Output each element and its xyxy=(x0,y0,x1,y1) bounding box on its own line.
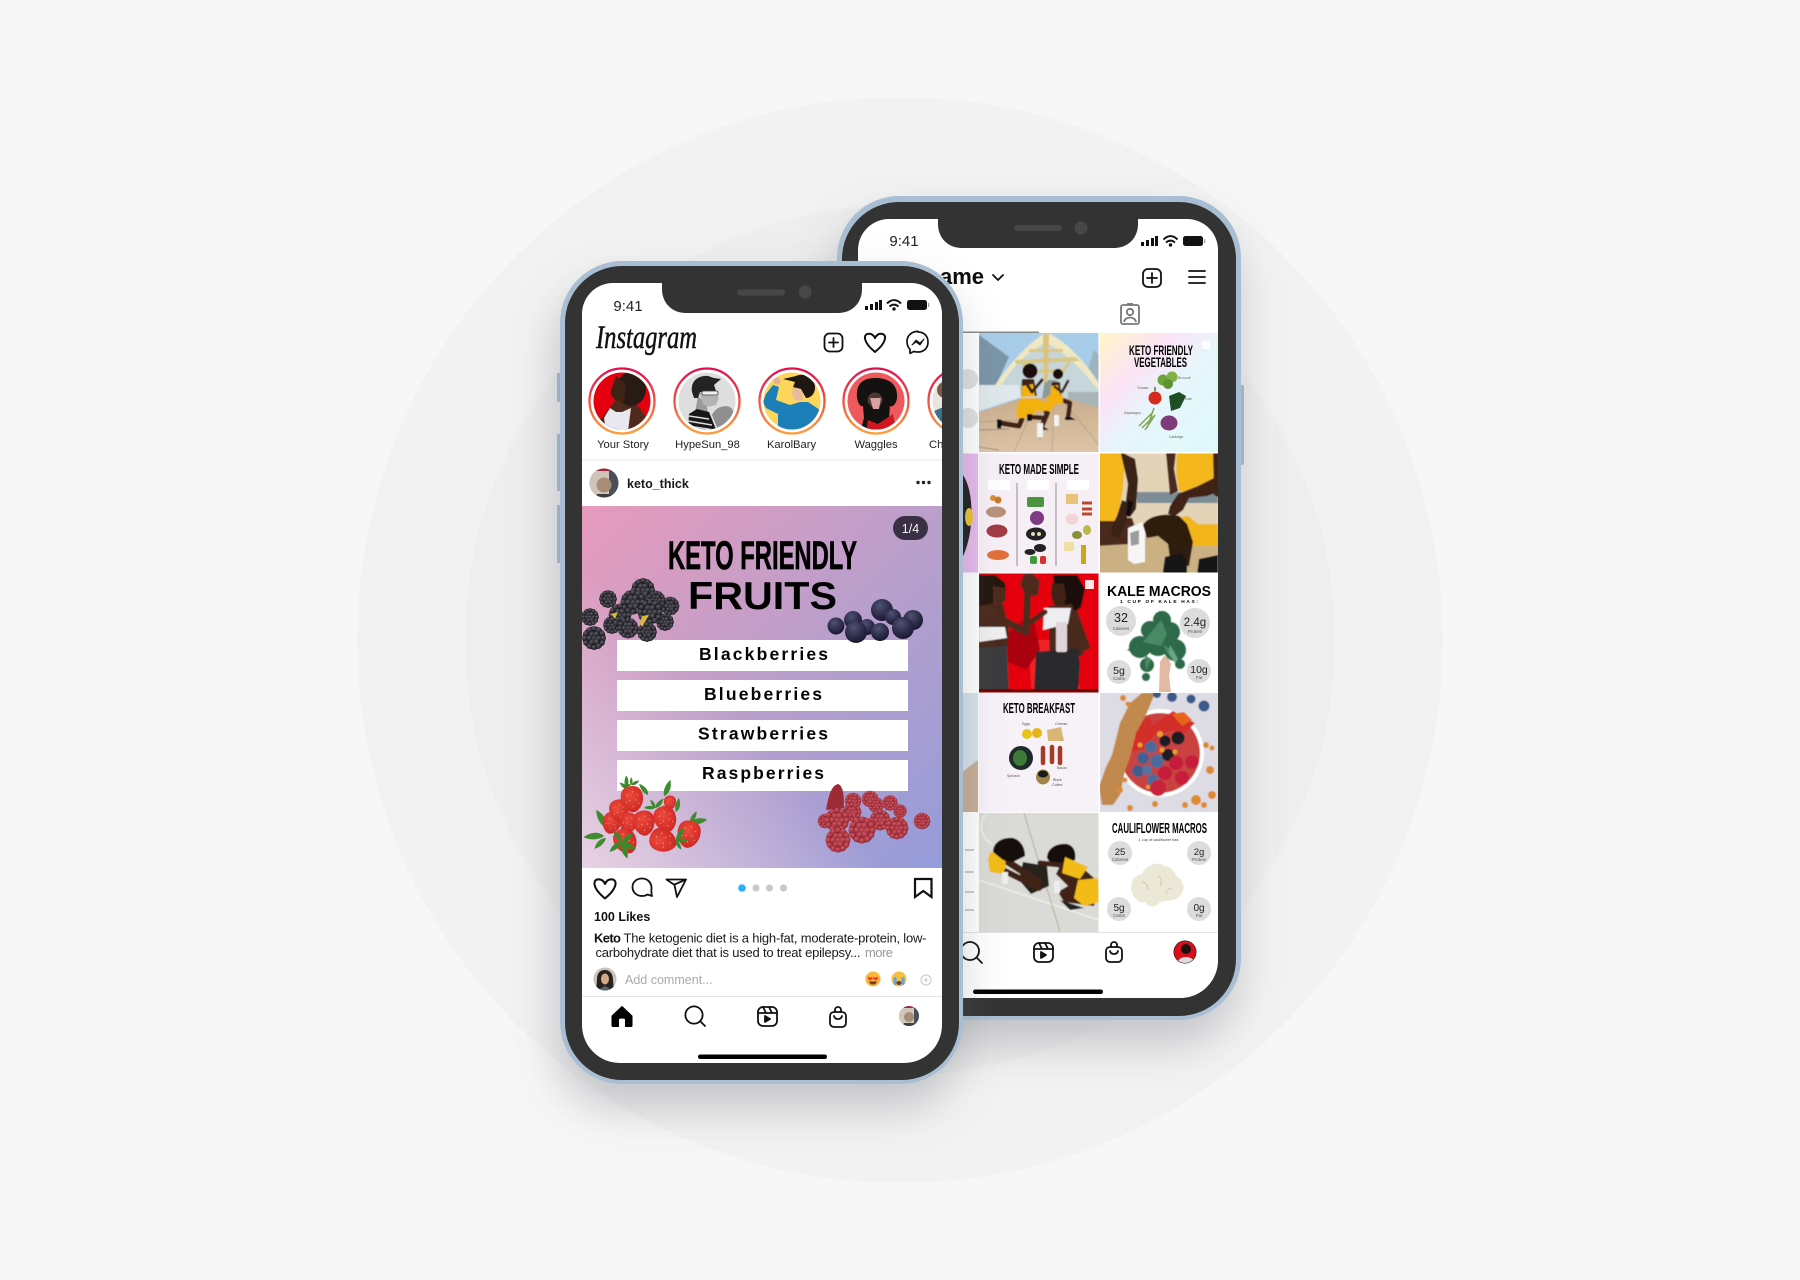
grid photo: high five on red xyxy=(979,574,1098,692)
story labels: KarolBary xyxy=(767,439,816,451)
grid card: kale macros: KALE MACROS xyxy=(1107,584,1211,600)
notch xyxy=(938,216,1138,248)
icon: notifications xyxy=(865,334,885,352)
icon: shop xyxy=(830,1007,846,1027)
grid card: cauliflower macros: 2g xyxy=(1194,847,1204,858)
story labels: HypeSun_98 xyxy=(675,439,740,451)
right woman xyxy=(1176,454,1214,492)
post avatar xyxy=(590,468,619,500)
icon: comment xyxy=(632,878,652,896)
grid card: cauliflower macros: Carbs xyxy=(1113,913,1126,918)
story labels: Waggles xyxy=(854,439,898,451)
grid card: cauliflower macros xyxy=(1107,823,1211,921)
grid card: kale macros xyxy=(1106,586,1211,692)
icon: add reaction xyxy=(921,975,931,985)
grid card: keto breakfast xyxy=(979,693,1098,812)
grid card: kale macros: 10g xyxy=(1190,664,1208,676)
caption xyxy=(594,930,926,960)
grid card: keto friendly vegetables: Tomato xyxy=(1137,386,1149,390)
icon: messenger xyxy=(907,331,928,353)
carousel dots xyxy=(738,884,787,892)
background circle: inner xyxy=(465,205,1335,1075)
fruit list: Strawberries xyxy=(698,724,828,744)
strawberries xyxy=(583,775,707,858)
icon: tagged xyxy=(1121,304,1139,324)
home indicator xyxy=(698,1054,827,1059)
grid card: kale macros: 2.4g xyxy=(1184,617,1206,629)
fruit list: Blackberries xyxy=(699,644,828,664)
grid card: cauliflower macros: Fat xyxy=(1196,913,1203,918)
nav divider xyxy=(582,996,942,997)
status bar xyxy=(613,298,929,315)
grid card: keto friendly vegetables: Cabbage xyxy=(1169,435,1183,439)
icon: shop xyxy=(1106,942,1122,962)
caption: Keto xyxy=(594,930,621,946)
profile avatar xyxy=(899,1006,919,1027)
icon: search xyxy=(685,1006,705,1026)
story divider xyxy=(582,460,942,461)
username header: Username xyxy=(878,264,984,289)
background circle: outer xyxy=(357,97,1443,1183)
post options xyxy=(916,481,931,484)
grid photo: sitting with milk xyxy=(1100,454,1218,572)
story labels xyxy=(597,439,943,451)
grid card: keto breakfast: Eggs xyxy=(1022,722,1030,726)
screen xyxy=(858,219,1222,998)
grid card: keto breakfast: Spinach xyxy=(1007,774,1020,778)
emoji: crying xyxy=(892,972,906,986)
profile avatar xyxy=(1174,940,1196,964)
comment row xyxy=(594,968,931,994)
page badge: 1/4 xyxy=(902,522,919,536)
story labels: Your Story xyxy=(597,439,649,451)
post actions xyxy=(594,878,932,898)
bottom nav: back phone xyxy=(963,932,1218,998)
grid card: keto friendly vegetables xyxy=(1100,333,1218,452)
comment row: Add comment... xyxy=(625,973,713,987)
grid card: cauliflower macros: 1 cup of cauliflower has: xyxy=(1139,838,1179,842)
left woman xyxy=(1100,517,1135,546)
milk carton xyxy=(1128,522,1145,564)
story: karolbary xyxy=(760,368,824,434)
phone body xyxy=(560,261,963,1084)
heading: KETO FRIENDLY xyxy=(668,534,857,578)
post username: keto_thick xyxy=(627,477,689,491)
grid card: kale macros: Carbs xyxy=(1113,676,1126,681)
commenter avatar xyxy=(594,968,616,994)
status bar: 9:41 xyxy=(613,298,643,315)
grid card: keto breakfast: Black xyxy=(1053,778,1062,782)
left woman xyxy=(979,604,1009,650)
icon: reels xyxy=(758,1007,777,1026)
tab underline xyxy=(963,332,1039,333)
grid card: cauliflower macros: 0g xyxy=(1193,903,1205,914)
icon: menu xyxy=(1189,271,1205,283)
grid card: keto breakfast: Bacon xyxy=(1057,766,1067,770)
front phone: feed xyxy=(557,261,994,1084)
story: hypesun_98 xyxy=(674,368,740,434)
blueberries xyxy=(828,599,923,643)
story: waggles xyxy=(844,368,908,434)
likes: 100 Likes xyxy=(594,910,650,924)
grid photo: stretching on concrete xyxy=(979,813,1098,932)
woman 2 xyxy=(1030,412,1048,418)
grid card: kale macros: 1 CUP OF KALE HAS: xyxy=(1120,599,1198,605)
grid card: keto breakfast: Cheese xyxy=(1055,722,1067,726)
grid photo: fruit bowl xyxy=(1100,693,1218,812)
caption: The ketogenic diet is a high-fat, moderate-protein, low- xyxy=(624,930,926,946)
fruit list: Blueberries xyxy=(704,684,822,704)
grid card: cauliflower macros: Calories xyxy=(1112,857,1129,862)
icon: add xyxy=(1143,269,1161,287)
story: your story xyxy=(590,368,654,434)
woman 1 xyxy=(1000,419,1022,426)
screen xyxy=(582,283,942,1063)
status bar: 9:41 xyxy=(889,233,919,250)
caption: carbohydrate diet that is used to treat epilepsy... xyxy=(596,945,860,960)
back phone: profile grid xyxy=(837,196,1244,1020)
caption: more xyxy=(865,945,893,960)
phone body xyxy=(837,196,1241,1020)
instagram logo: Instagram xyxy=(595,320,697,356)
icon: like xyxy=(594,879,616,898)
page badge xyxy=(893,516,928,540)
speaker and camera xyxy=(737,286,812,298)
right woman xyxy=(1053,575,1085,615)
story: partial xyxy=(928,368,994,434)
phone side buttons xyxy=(557,373,560,563)
emoji: heart eyes xyxy=(866,972,880,986)
grid card: kale macros: Fat xyxy=(1196,675,1203,680)
icon: home xyxy=(612,1006,632,1026)
grid card: kale macros: 5g xyxy=(1113,665,1125,677)
grid card: cauliflower macros: Protein xyxy=(1192,857,1207,862)
grid card: kale macros: Protein xyxy=(1188,629,1203,634)
grid card: cauliflower macros: 5g xyxy=(1113,903,1125,914)
grid card: keto breakfast: Coffee xyxy=(1052,783,1063,787)
grid photo: bridge lunge xyxy=(979,333,1098,452)
grid card: keto made simple xyxy=(979,454,1098,572)
grid card: keto friendly vegetables: Asparagus xyxy=(1124,411,1141,415)
grid card: kale macros: 32 xyxy=(1114,611,1128,625)
icon: search xyxy=(961,942,982,963)
bottom nav: front phone xyxy=(612,1006,919,1059)
blackberries xyxy=(581,578,679,650)
story labels: Ch xyxy=(929,439,943,451)
grid card: keto friendly vegetables: Broccoli xyxy=(1178,376,1191,380)
icon: share xyxy=(666,880,686,897)
icon: reels xyxy=(1034,943,1053,962)
notch xyxy=(662,280,862,313)
icon: save xyxy=(915,879,932,897)
raspberries xyxy=(818,784,930,853)
fruit list xyxy=(617,640,908,791)
home indicator xyxy=(973,990,1103,994)
fruit list: Raspberries xyxy=(702,763,824,783)
icon: add post xyxy=(824,334,842,352)
grid card: keto friendly vegetables: Kale xyxy=(1185,397,1192,401)
grid column 1 remnant xyxy=(963,369,978,911)
status bar xyxy=(889,233,1205,250)
grid card: cauliflower macros: 25 xyxy=(1115,847,1125,858)
post image: keto friendly fruits xyxy=(581,506,942,868)
post image: keto friendly fruits: FRUITS xyxy=(688,575,837,618)
grid card: kale macros: Calories xyxy=(1113,626,1130,631)
chevron xyxy=(993,275,1003,280)
phone side button xyxy=(1239,385,1244,465)
